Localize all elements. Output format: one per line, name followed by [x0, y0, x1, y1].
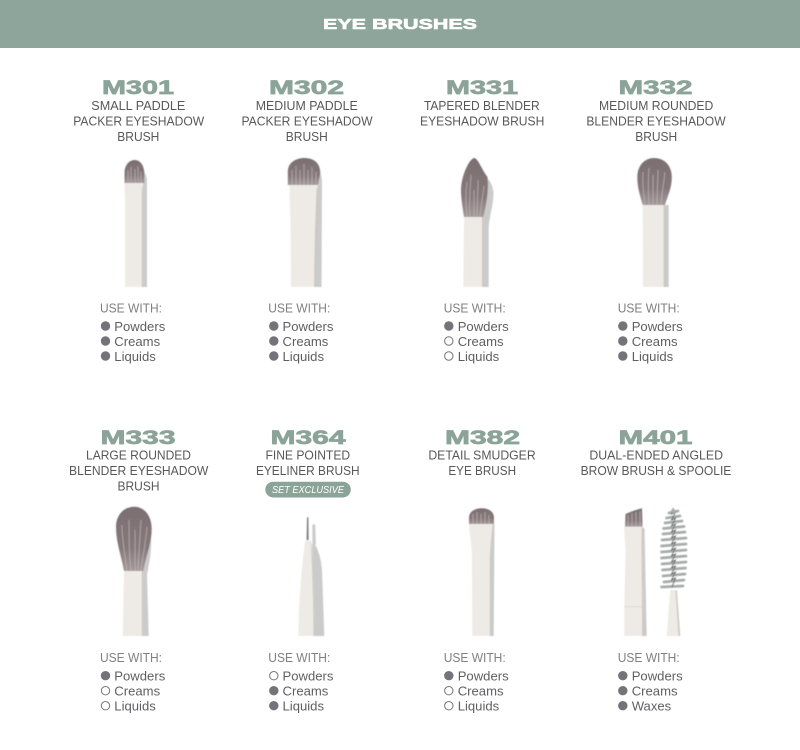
use with legend: USE WITH: — [268, 650, 330, 665]
product name — [420, 98, 544, 128]
product name: TAPERED BLENDER — [424, 98, 540, 113]
product name: DETAIL SMUDGER — [428, 448, 536, 462]
use with legend — [268, 650, 334, 714]
product name — [256, 448, 360, 478]
use with legend: USE WITH: — [444, 300, 506, 316]
use with legend — [100, 300, 166, 364]
product name: PACKER EYESHADOW — [242, 114, 373, 128]
brush illustration — [288, 158, 322, 287]
title: EYE BRUSHES — [323, 16, 477, 33]
panel: M382 — [428, 427, 536, 714]
product code: M382 — [445, 427, 520, 449]
product name: FINE POINTED — [265, 448, 350, 462]
product name: BRUSH — [117, 129, 159, 144]
use with legend: USE WITH: — [618, 650, 680, 665]
panel: M401 — [581, 427, 732, 714]
product code: M332 — [618, 77, 693, 99]
product name: BRUSH — [118, 479, 160, 494]
use with legend: Creams — [632, 684, 678, 698]
product name — [428, 448, 536, 478]
use with legend: Powders — [114, 668, 166, 684]
use with legend — [268, 300, 334, 364]
panel: M302 — [242, 77, 373, 364]
set exclusive badge: SET EXCLUSIVE — [272, 484, 345, 496]
use with legend: Powders — [114, 319, 166, 334]
product code: M364 — [270, 427, 346, 449]
use with legend — [444, 650, 509, 714]
use with legend: Liquids — [282, 349, 324, 364]
product name: SMALL PADDLE — [91, 98, 186, 113]
product name: BRUSH — [286, 129, 328, 144]
use with legend: Powders — [458, 319, 509, 334]
use with legend — [618, 650, 683, 714]
spoolie — [662, 508, 686, 636]
product name: LARGE ROUNDED — [86, 448, 191, 462]
product name — [69, 448, 209, 494]
product name: EYESHADOW BRUSH — [420, 114, 544, 128]
brush illustration — [124, 160, 147, 287]
set exclusive badge — [265, 482, 351, 498]
use with legend: Liquids — [458, 698, 500, 714]
product code: M302 — [269, 77, 344, 99]
panel: M332 — [586, 77, 726, 364]
use with legend: Liquids — [114, 698, 156, 714]
use with legend: Liquids — [458, 349, 500, 364]
use with legend: USE WITH: — [100, 300, 162, 316]
use with legend: USE WITH: — [100, 650, 162, 665]
use with legend: Powders — [632, 319, 683, 334]
product name — [581, 448, 732, 478]
use with legend: Powders — [282, 319, 334, 334]
use with legend: Powders — [458, 668, 509, 684]
product name: BLENDER EYESHADOW — [69, 463, 209, 478]
product name: EYE BRUSH — [448, 463, 516, 478]
use with legend: Creams — [282, 334, 329, 349]
use with legend: Creams — [632, 334, 678, 349]
use with legend — [618, 300, 683, 364]
use with legend: Waxes — [632, 698, 672, 714]
product name: BROW BRUSH & SPOOLIE — [581, 463, 732, 478]
product code: M301 — [102, 77, 174, 99]
panel: M331 — [420, 77, 544, 364]
use with legend: Liquids — [114, 349, 156, 364]
product name — [242, 98, 373, 144]
use with legend: USE WITH: — [618, 300, 680, 316]
brush illustration — [461, 158, 494, 287]
product code: M331 — [446, 77, 518, 99]
product code: M333 — [100, 427, 176, 449]
product name: DUAL-ENDED ANGLED — [589, 448, 723, 462]
panel: M333 — [69, 427, 209, 714]
use with legend: Creams — [282, 684, 329, 698]
use with legend: Liquids — [632, 349, 674, 364]
header bar — [0, 0, 800, 48]
product name: BLENDER EYESHADOW — [586, 114, 726, 128]
product name: MEDIUM ROUNDED — [599, 98, 713, 113]
product name: EYELINER BRUSH — [256, 463, 360, 478]
panel: M364 — [256, 427, 360, 714]
use with legend — [444, 300, 509, 364]
angled brow brush — [624, 508, 647, 636]
product name — [586, 98, 726, 144]
brush illustration — [298, 516, 324, 636]
use with legend: Liquids — [282, 698, 324, 714]
use with legend: Creams — [458, 334, 504, 349]
product name: MEDIUM PADDLE — [256, 98, 358, 113]
use with legend: Creams — [458, 684, 504, 698]
use with legend: Powders — [632, 668, 683, 684]
panel: M301 — [73, 77, 205, 364]
product name: PACKER EYESHADOW — [73, 114, 205, 128]
product name: BRUSH — [635, 129, 677, 144]
brush illustration — [637, 158, 672, 287]
product name — [73, 98, 205, 144]
use with legend: Powders — [282, 668, 334, 684]
brush illustration — [469, 508, 494, 636]
use with legend: Creams — [114, 684, 161, 698]
use with legend: USE WITH: — [444, 650, 506, 665]
use with legend — [100, 650, 166, 714]
use with legend: Creams — [114, 334, 161, 349]
product code: M401 — [618, 427, 693, 449]
use with legend: USE WITH: — [268, 300, 330, 316]
brush illustration — [116, 507, 152, 636]
